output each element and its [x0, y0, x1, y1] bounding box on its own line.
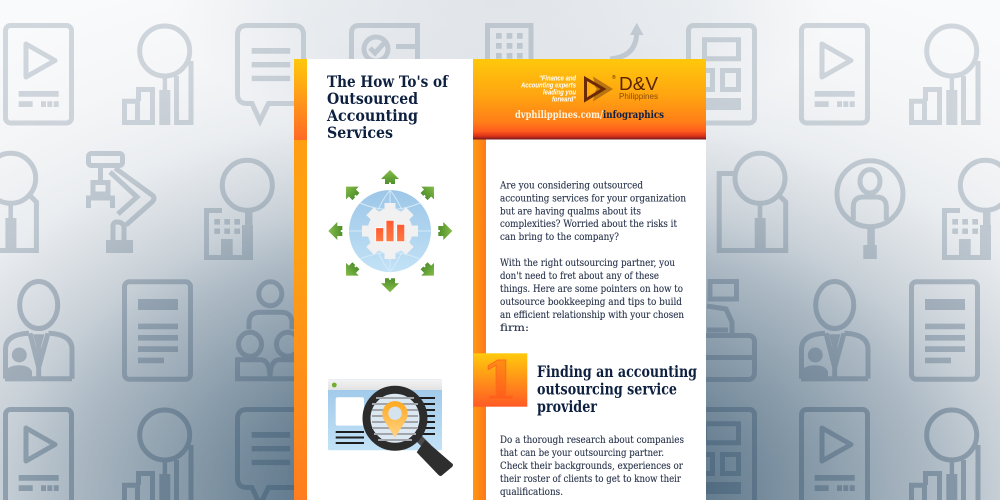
bars [376, 220, 405, 242]
tagline quote: leading you [543, 90, 577, 96]
website link: infographics [603, 109, 664, 121]
icon: group of people [238, 282, 305, 379]
heading: step 1: outsourcing service [537, 380, 677, 398]
step 1 text: Do a thorough research about companies [500, 435, 684, 446]
magnifier handle [414, 433, 453, 476]
icon: text document [124, 282, 190, 379]
icon: magnifier over bar chart [124, 410, 191, 500]
icon: robot arm [88, 154, 154, 253]
intro text: but are having qualms about its [500, 206, 641, 218]
logo wordmark: ® [612, 74, 616, 81]
background icons row 3 [5, 282, 978, 381]
magnifier lens [366, 390, 424, 447]
arrows [328, 170, 452, 292]
header banner [473, 59, 706, 140]
icon: page layout [688, 410, 754, 500]
tagline quote [520, 76, 577, 104]
gear [362, 203, 418, 259]
icon: video document [6, 410, 72, 500]
tagline quote: forward" [552, 96, 577, 104]
icon: video document [802, 26, 868, 123]
title: The How To's of [327, 72, 449, 91]
icon: stamp [700, 282, 754, 380]
number badge [473, 351, 527, 412]
icon: magnifier over bar chart [912, 410, 978, 500]
icon: D&V logo arrows [586, 76, 613, 102]
website link: dvphilippines.com/ [515, 109, 603, 121]
icon: text document [912, 282, 978, 379]
intro text: complexities? Worried about the risks it [500, 219, 677, 230]
step 1 text [500, 435, 684, 498]
step 1 text: that can be your outsourcing partner. [500, 448, 664, 459]
icon: magnifier over building [206, 160, 272, 260]
right orange strip [473, 140, 486, 500]
title [326, 72, 449, 142]
icon: magnifier over document [0, 153, 36, 253]
icon: growth arrow [610, 23, 644, 59]
icon: businessman [5, 282, 72, 381]
globe [349, 190, 431, 272]
icon: magnifier over person [837, 161, 903, 259]
intro text [499, 180, 686, 334]
panel: infographic card [294, 59, 706, 500]
step 1 text: Check their backgrounds, experiences or [500, 461, 683, 472]
icon: businessman [801, 282, 868, 381]
intro text: can bring to the company? [500, 232, 619, 243]
title: Services [327, 123, 393, 142]
icon: magnifier over bar chart [912, 26, 978, 125]
intro text: outsource bookkeeping and tips to build [500, 297, 683, 308]
step 1 text: qualifications. [500, 487, 563, 498]
icon: checklist card [352, 26, 418, 83]
icon: page layout [688, 26, 754, 123]
step 1 text: their roster of clients to get to know their [500, 474, 681, 485]
title: Outsourced [327, 89, 418, 108]
number badge: 1 [482, 351, 518, 412]
background icons row 2 [0, 153, 1000, 260]
icon: speech bubble [238, 26, 304, 121]
icon: office building [488, 26, 531, 83]
intro text: an efficient relationship with your chosen [500, 310, 684, 321]
browser window [328, 379, 442, 450]
icon: video document [802, 410, 868, 500]
intro text: firm: [500, 323, 529, 334]
location pin [382, 401, 408, 438]
title: Accounting [326, 106, 418, 125]
logo wordmark: D&V [619, 74, 658, 94]
icon: globe with gear and arrows [328, 170, 452, 292]
tagline quote: "Finance and [539, 76, 577, 82]
heading: step 1 [537, 362, 697, 416]
background icons row 4 [6, 410, 978, 500]
heading: step 1: provider [537, 397, 598, 416]
logo wordmark: Philippines [619, 92, 658, 101]
intro text: With the right outsourcing partner, you [500, 258, 675, 269]
icon: magnifier over browser window [328, 379, 453, 476]
intro text: don't need to fret about any of these [500, 271, 659, 282]
icon: magnifier over building [944, 160, 1000, 260]
icon: magnifier over document [719, 153, 786, 253]
icon: magnifier over bar chart [124, 26, 191, 125]
background icons row 1 [6, 23, 978, 125]
left orange strip [294, 59, 307, 500]
icon: video document [6, 26, 72, 123]
icon: speech bubble [238, 410, 304, 500]
logo wordmark [612, 74, 658, 101]
intro text: things. Here are some pointers on how to [500, 284, 683, 295]
tagline quote: Accounting experts [520, 82, 576, 90]
intro text: Are you considering outsourced [499, 180, 644, 192]
intro text: accounting services for your organization [500, 194, 686, 204]
heading: step 1: Finding an accounting [537, 362, 697, 381]
